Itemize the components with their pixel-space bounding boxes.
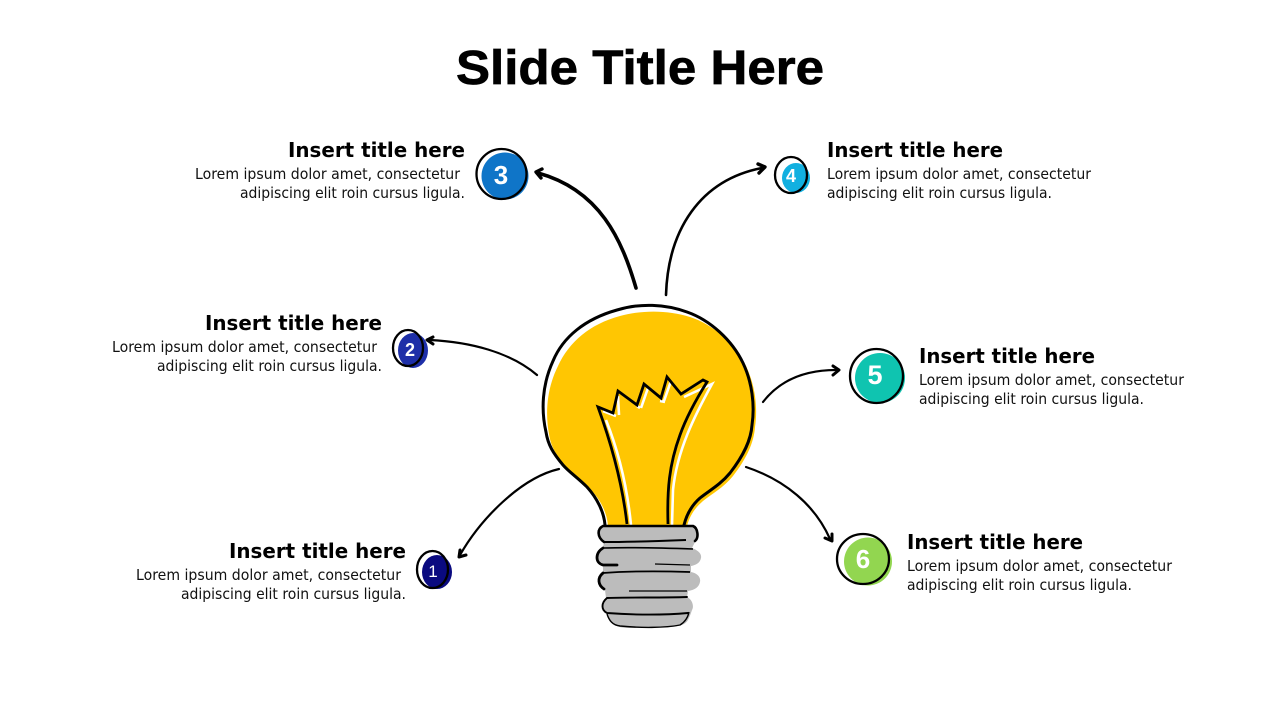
body 5: Lorem ipsum dolor amet, consectetur [919,372,1185,389]
body 4 [827,166,1092,202]
body 4: adipiscing elit roin cursus ligula. [827,185,1052,202]
arrow: bulb to item 6 [746,467,832,541]
heading 3: Insert title here [288,138,465,162]
item 2 [112,311,428,375]
arrow: bulb to item 1 [459,469,559,557]
item 1 [136,539,452,603]
badge 4: 4 [786,166,796,186]
body 5: adipiscing elit roin cursus ligula. [919,391,1144,408]
badge 5 [850,349,905,403]
item 5 [850,344,1185,408]
badge 3 [476,149,528,200]
arrow: bulb to item 3 [536,169,636,288]
bulb glass fill [547,312,756,526]
body 6 [907,558,1173,594]
badge 2: 2 [405,340,415,360]
body 4: Lorem ipsum dolor amet, consectetur [827,166,1092,183]
title: Slide Title Here [456,41,824,95]
arrow: bulb to item 4 [666,164,765,295]
icon: light bulb [543,305,756,628]
filament [598,377,707,524]
body 1 [136,567,406,603]
badge 6: 6 [856,544,870,574]
heading 4: Insert title here [827,138,1003,162]
badge 3: 3 [494,160,508,190]
arrow: bulb to item 5 [763,366,839,402]
heading 1: Insert title here [229,539,406,563]
body 6: adipiscing elit roin cursus ligula. [907,577,1132,594]
item 3 [195,138,528,202]
screw base [597,526,701,628]
arrow: bulb to item 2 [427,337,537,375]
body 1: adipiscing elit roin cursus ligula. [181,586,406,603]
body 2: Lorem ipsum dolor amet, consectetur [112,339,378,356]
filament highlight [603,381,712,525]
badge 1 [417,551,452,589]
badge 6 [837,534,892,586]
item 6 [837,530,1173,594]
badge 2 [393,330,428,368]
heading 5: Insert title here [919,344,1095,368]
body 3: Lorem ipsum dolor amet, consectetur [195,166,461,183]
body 2: adipiscing elit roin cursus ligula. [157,358,382,375]
badge 1: 1 [428,562,438,581]
body 3: adipiscing elit roin cursus ligula. [240,185,465,202]
body 5 [919,372,1185,408]
body 6: Lorem ipsum dolor amet, consectetur [907,558,1173,575]
bulb glass outline [543,305,753,525]
badge 5: 5 [867,360,883,390]
item 4 [775,138,1092,202]
badge 4 [775,157,810,193]
heading 6: Insert title here [907,530,1083,554]
body 3 [195,166,465,202]
body 2 [112,339,382,375]
body 1: Lorem ipsum dolor amet, consectetur [136,567,402,584]
heading 2: Insert title here [205,311,382,335]
